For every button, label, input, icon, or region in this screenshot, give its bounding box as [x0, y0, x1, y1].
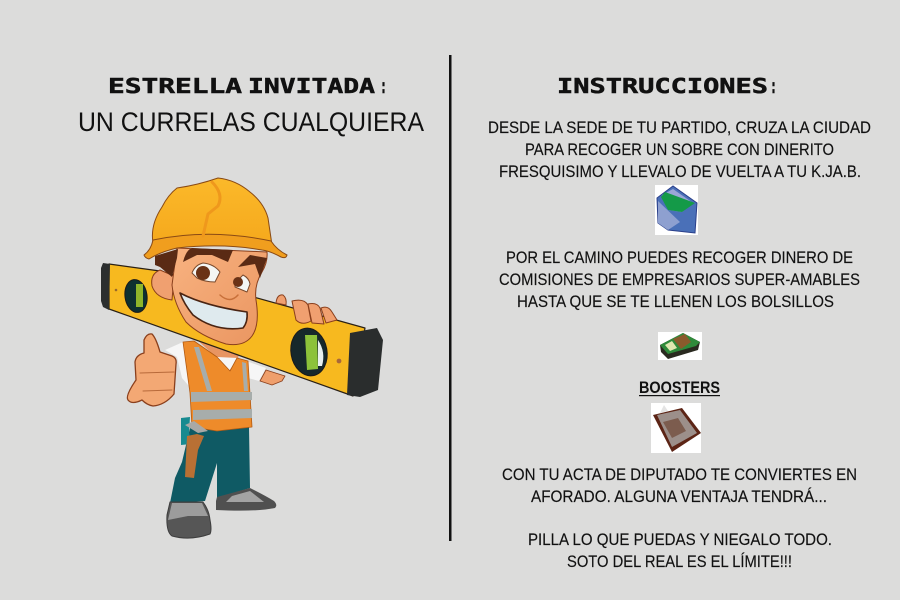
- left vial bubble: [136, 284, 143, 307]
- right shoe highlight: [226, 491, 264, 502]
- icon: envelope with money: [655, 185, 698, 235]
- level screws: [115, 289, 117, 291]
- text block: aforado: [502, 466, 857, 506]
- right hand: [260, 370, 285, 385]
- text block: first instructions: [488, 119, 871, 181]
- divider line: [449, 55, 452, 541]
- left pupil: [196, 266, 210, 280]
- left vial: [123, 278, 149, 314]
- helmet dome: [152, 178, 272, 246]
- text block: commissions: HASTA QUE SE TE LLENEN LOS BOLSILLOS: [517, 293, 834, 311]
- heading: estrella invitada: INVITADA: [248, 74, 375, 98]
- grin: [180, 293, 247, 329]
- nose: [220, 295, 238, 300]
- heading: estrella invitada: :: [380, 74, 387, 98]
- vest reflective stripes: [191, 347, 252, 420]
- helmet brim: [144, 234, 287, 259]
- left sleeve: [165, 342, 194, 392]
- hammer handle: [185, 434, 204, 478]
- left shoe: [167, 502, 211, 538]
- heading: instrucciones: :: [770, 74, 777, 98]
- thumbs-up fist: [127, 334, 176, 406]
- right pupil: [233, 277, 243, 287]
- text block: first instructions: FRESQUISIMO Y LLEVALO DE VUELTA A TU K.JA.B.: [499, 163, 861, 181]
- text block: closing line: SOTO DEL REAL ES EL LÍMITE!!!: [567, 552, 792, 571]
- safety vest: [183, 341, 252, 431]
- finger lines: [140, 372, 174, 391]
- illustration: construction worker with spirit level: [101, 178, 383, 538]
- spirit level left cap: [101, 263, 110, 310]
- right sleeve: [246, 361, 266, 381]
- text block: aforado: CON TU ACTA DE DIPUTADO TE CONVIERTES EN: [502, 466, 857, 484]
- hair: [155, 249, 178, 277]
- tool belt wrench: [181, 417, 191, 445]
- ear: [152, 270, 174, 300]
- right vial: [287, 325, 331, 379]
- text block: closing line: [528, 531, 832, 571]
- shirt collar: [217, 357, 238, 371]
- trousers: [170, 427, 250, 503]
- left eye: [192, 263, 220, 282]
- right vial bubble: [305, 335, 318, 370]
- icon: wad of banknotes: [658, 332, 702, 360]
- text block: closing line: PILLA LO QUE PUEDAS Y NIEGALO TODO.: [528, 531, 832, 549]
- right eyebrow: [238, 255, 267, 278]
- icon: clipboard deputy record: [651, 403, 701, 453]
- text block: commissions: [499, 249, 860, 311]
- heading: instrucciones: INSTRUCCIONES: [557, 74, 768, 98]
- text block: commissions: POR EL CAMINO PUEDES RECOGER DINERO DE: [506, 249, 853, 267]
- right eye: [235, 275, 250, 292]
- text block: commissions: COMISIONES DE EMPRESARIOS SUPER-AMABLES: [499, 271, 860, 289]
- text block: first instructions: PARA RECOGER UN SOBRE CON DINERITO: [525, 141, 834, 159]
- heading: estrella invitada: [108, 74, 387, 98]
- spirit level right cap: [347, 328, 383, 397]
- helmet ridge: [203, 182, 220, 236]
- right vial shine: [318, 340, 323, 366]
- hammer head: [185, 421, 208, 433]
- neck: [195, 338, 240, 372]
- text block: aforado: AFORADO. ALGUNA VENTAJA TENDRÁ...: [531, 487, 827, 506]
- text block: first instructions: DESDE LA SEDE DE TU PARTIDO, CRUZA LA CIUDAD: [488, 119, 871, 137]
- left eyebrow: [183, 248, 233, 262]
- spirit level body: [109, 264, 365, 396]
- subtitle: un currelas cualquiera: UN CURRELAS CUALQUIERA: [78, 107, 424, 137]
- left shoe highlight: [168, 503, 208, 520]
- heading: boosters: BOOSTERS: [639, 378, 720, 397]
- fingers on level: [276, 295, 337, 324]
- heading: estrella invitada: ESTRELLA: [108, 74, 242, 98]
- face: [172, 248, 267, 345]
- right shoe: [216, 488, 276, 511]
